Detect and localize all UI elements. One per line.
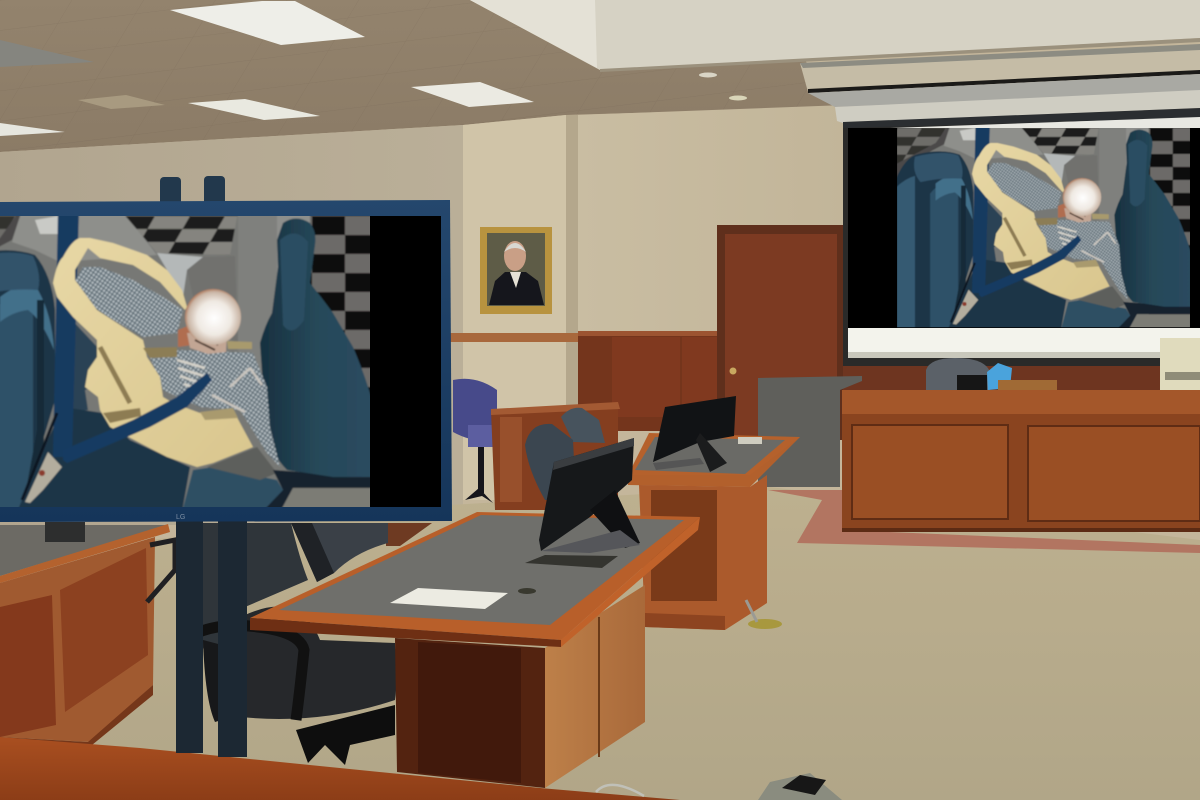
brand label: LG <box>176 514 185 521</box>
display video <box>0 210 374 512</box>
screen wall panelling <box>843 362 1200 392</box>
left display <box>0 200 452 522</box>
front monitor <box>539 438 640 553</box>
display black bar <box>370 216 441 507</box>
grey equipment cabinet <box>758 376 862 487</box>
front counsel table <box>250 512 700 788</box>
display bezel <box>0 200 452 522</box>
red carpet inset <box>768 490 1200 553</box>
column <box>463 115 578 500</box>
floor cable and speaker <box>596 773 842 800</box>
objects on bench <box>957 338 1200 393</box>
brown cabinet behind chairs <box>386 523 432 546</box>
projector screen <box>835 90 1200 366</box>
grommet <box>518 588 536 594</box>
carpet <box>0 487 1200 800</box>
table cabinet side <box>545 585 645 788</box>
left counsel table <box>0 522 170 745</box>
rear counsel chairs <box>525 408 605 500</box>
portrait painting <box>480 227 552 314</box>
ceiling vent: tan <box>78 95 165 109</box>
ceiling <box>0 0 835 152</box>
front chair <box>193 523 396 765</box>
ceiling vent: left <box>0 40 94 67</box>
second front chair <box>291 523 388 582</box>
ceiling soffit <box>470 0 1200 72</box>
screen video <box>894 124 1193 331</box>
left chair base <box>147 540 175 602</box>
judge bench <box>842 390 1200 532</box>
purple chair <box>453 379 497 503</box>
back credenza <box>491 402 620 510</box>
chair near <box>525 424 575 500</box>
rear counsel table <box>628 433 800 630</box>
table cabinet front <box>395 638 545 788</box>
ceiling downlights <box>699 72 747 100</box>
cable tray <box>525 555 618 568</box>
right back wall <box>578 105 845 380</box>
ceiling light: large <box>170 1 365 45</box>
ceiling light: right <box>411 82 534 107</box>
judge chair <box>926 358 990 392</box>
tabletop <box>250 512 700 640</box>
door <box>717 225 844 440</box>
wainscot panelling <box>450 331 720 431</box>
ceiling light: centre <box>188 99 320 120</box>
projector housing <box>800 44 1200 107</box>
chair far <box>561 408 605 443</box>
paper <box>390 588 508 609</box>
rear monitor <box>653 396 762 472</box>
left back wall <box>0 125 463 525</box>
monitor stand poles <box>160 176 247 757</box>
foreground rail <box>0 737 680 800</box>
ceiling light: far left <box>0 123 65 136</box>
